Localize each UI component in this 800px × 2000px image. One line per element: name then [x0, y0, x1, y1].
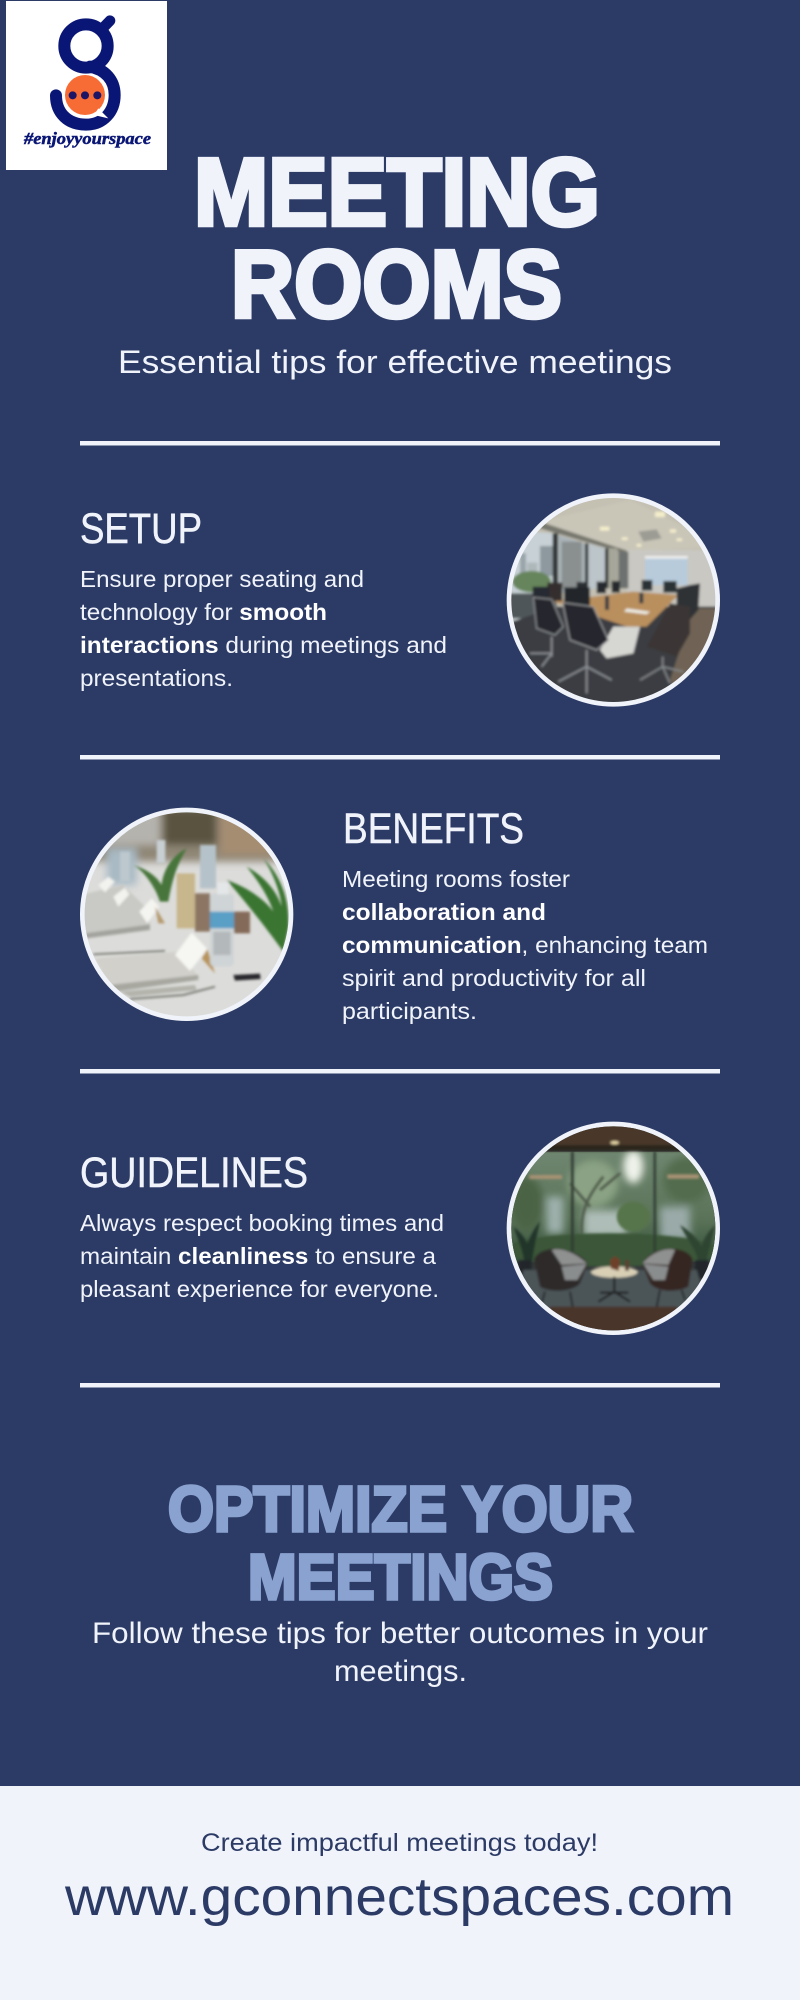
- title: ROOMS: [231, 231, 562, 338]
- text block: benefits: participants.: [342, 998, 477, 1024]
- heading: optimize your meetings: OPTIMIZE YOUR: [168, 1473, 633, 1545]
- text block: follow tips: meetings.: [334, 1655, 467, 1688]
- text block: setup: [80, 566, 447, 691]
- text block: setup: technology for smooth: [80, 599, 327, 625]
- logo: [6, 1, 167, 170]
- footer call to action: Create impactful meetings today!: [201, 1829, 598, 1857]
- heading: benefits: BENEFITS: [343, 805, 524, 853]
- text block: setup: interactions during meetings and: [80, 632, 447, 658]
- panel: benefits: [77, 805, 708, 1025]
- panel: setup: [80, 490, 723, 713]
- heading: optimize your meetings: MEETINGS: [248, 1541, 553, 1613]
- text block: benefits: collaboration and: [342, 899, 546, 925]
- photo: table setting: [77, 805, 297, 1025]
- text block: guidelines: Always respect booking times and: [80, 1210, 444, 1236]
- subtitle: Essential tips for effective meetings: [118, 344, 672, 380]
- text block: follow tips: [92, 1617, 708, 1688]
- photo: lounge with garden view: [503, 1120, 723, 1340]
- text block: setup: presentations.: [80, 665, 233, 691]
- text block: guidelines: maintain cleanliness to ensure a: [80, 1243, 436, 1269]
- title: MEETING: [194, 139, 600, 246]
- text block: benefits: spirit and productivity for all: [342, 965, 646, 991]
- text block: benefits: Meeting rooms foster: [342, 866, 570, 892]
- text block: benefits: [342, 866, 708, 1024]
- text block: guidelines: pleasant experience for everyone.: [80, 1276, 439, 1302]
- text block: guidelines: [80, 1210, 444, 1302]
- title: [194, 139, 600, 338]
- text block: follow tips: Follow these tips for better outcomes in your: [92, 1617, 708, 1650]
- heading: optimize your meetings: [168, 1473, 633, 1613]
- heading: guidelines: GUIDELINES: [80, 1149, 308, 1197]
- panel: guidelines: [80, 1120, 723, 1340]
- heading: setup: SETUP: [80, 505, 202, 553]
- footer url: www.gconnectspaces.com: [64, 1867, 734, 1927]
- footer panel: [0, 1786, 800, 2000]
- photo: conference room: [503, 490, 723, 713]
- text block: benefits: communication , enhancing team: [342, 932, 708, 958]
- text block: setup: Ensure proper seating and: [80, 566, 364, 592]
- logo: #enjoyyourspace: [23, 129, 151, 148]
